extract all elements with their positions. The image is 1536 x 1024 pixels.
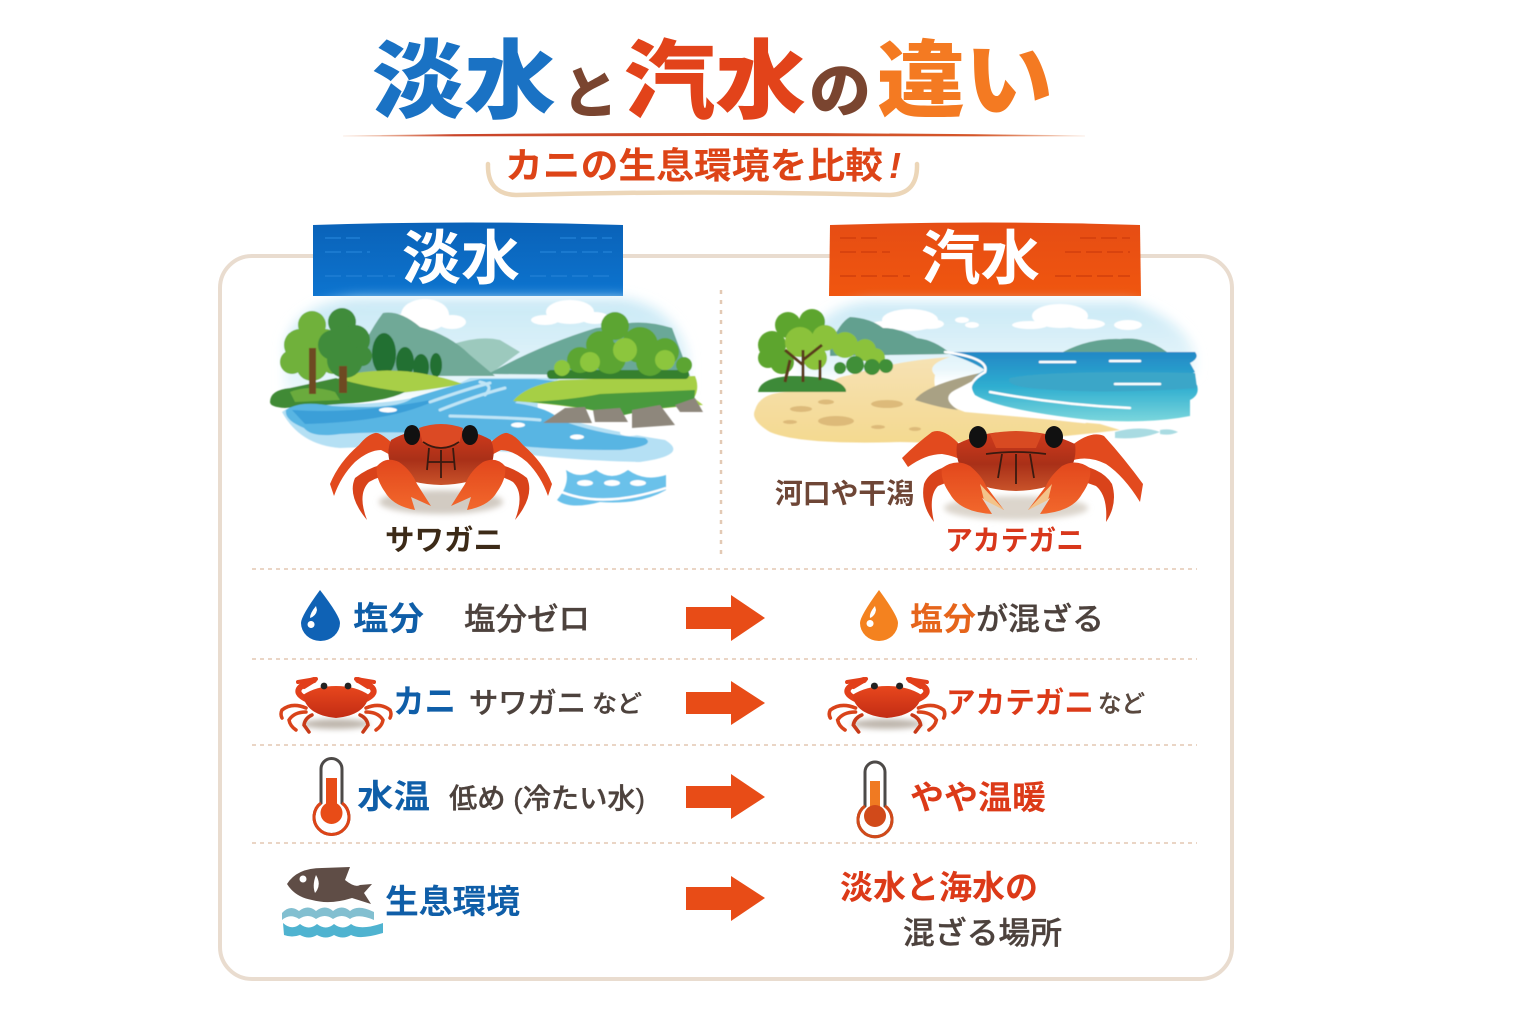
tree: right [318,308,372,393]
illustration: river landscape [270,298,703,506]
title word: 汽水: 汽水 [624,34,806,130]
label: 塩分 orange: 塩分 [910,601,976,637]
arrow [686,681,765,725]
icon: small crab left [281,679,391,732]
subtitle exclamation: ! [889,145,901,186]
value: サワガニ: サワガニ [469,687,586,720]
header tab: 汽水 [829,222,1141,296]
label: 水温: 水温 [357,778,430,815]
subtitle bracket [488,164,917,195]
label: カニ: カニ [393,683,456,720]
tab label: 汽水 [921,226,1040,292]
title word: 淡水: 淡水 [372,34,556,130]
row: crab [281,679,1145,732]
icon: thermometer right [858,762,892,837]
label: 生息環境: 生息環境 [385,883,520,920]
row: water temperature [314,758,1046,837]
orange drop highlight [867,606,876,627]
icon: orange drop [860,590,898,641]
icon: crab right [902,426,1143,522]
header tab: 淡水 [313,222,623,296]
title [372,34,1053,130]
value: 混ざる場所: 混ざる場所 [903,916,1062,951]
arrow [686,774,765,819]
blue drop highlight [308,606,317,628]
title word: の: の [809,58,871,125]
panel: comparison [220,256,1232,979]
mangrove trees [758,309,893,392]
icon: blue drop [301,590,340,641]
label: 塩分: 塩分 [353,600,424,637]
value: など: など [592,691,642,718]
icon: fish and waves [282,867,383,938]
icon: crab left [330,424,552,520]
tree: left [280,311,345,394]
center dashed divider [720,290,722,556]
title word: 違い: 違い [877,34,1053,128]
icon: thermometer left [314,758,349,834]
subtitle text: カニの生息環境を比較 [505,145,883,186]
label: 河口や干潟: 河口や干潟 [775,478,914,509]
illustration: estuary landscape [754,302,1198,443]
icon: small crab right [829,679,945,732]
value: やや温暖: やや温暖 [910,779,1046,816]
subtitle [488,145,917,195]
value: など right: など [1098,691,1145,718]
arrow [686,876,765,921]
value: が混ざる: が混ざる [976,602,1104,637]
pale water halo [282,378,673,462]
label: アカテガニ: アカテガニ [946,687,1094,720]
arrow [686,595,765,641]
bush: right bank [547,312,692,379]
waves decoration [557,470,666,506]
rocks [543,398,703,428]
value: 低め (冷たい水): 低め (冷たい水) [449,783,645,814]
row: salinity [301,590,1104,641]
label: サワガニ: サワガニ [385,524,503,557]
title divider line [343,134,1085,136]
row: habitat [282,867,1062,951]
tab label: 淡水 [402,226,520,292]
value: 塩分ゼロ: 塩分ゼロ [464,602,590,637]
label: アカテガニ: アカテガニ [945,525,1084,556]
title word: と: と [562,62,618,125]
value: 淡水と海水の: 淡水と海水の [840,869,1038,906]
